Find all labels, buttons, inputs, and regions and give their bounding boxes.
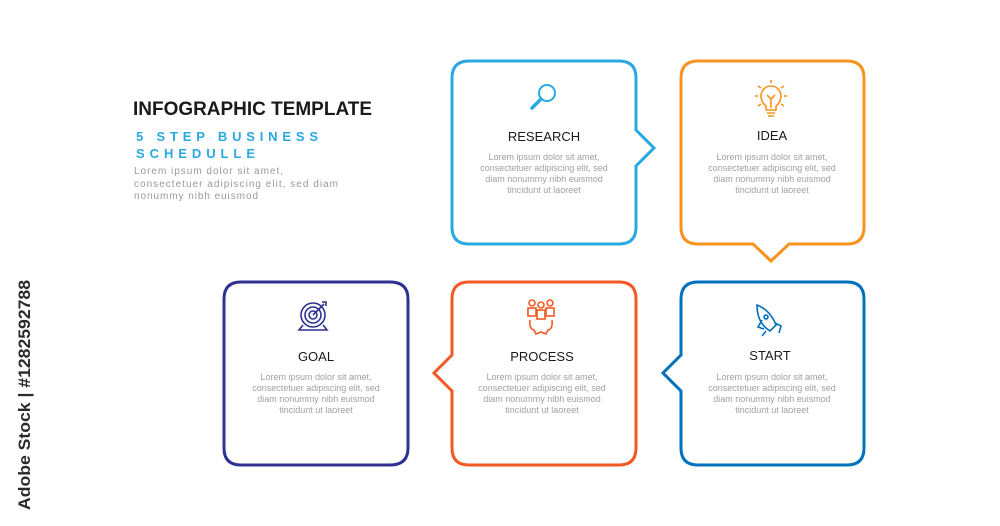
panel: start: diam nonummy nibh euismod xyxy=(713,394,831,404)
intro text: nonummy nibh euismod xyxy=(134,191,258,202)
panel: idea: IDEA xyxy=(757,128,787,143)
panel: goal: Lorem ipsum dolor sit amet, xyxy=(260,372,372,382)
subtitle: SCHEDULLE xyxy=(136,146,255,161)
icon: light bulb xyxy=(755,80,787,116)
intro text xyxy=(134,166,338,202)
icon: rocket xyxy=(757,305,781,336)
panel: process: diam nonummy nibh euismod xyxy=(483,394,601,404)
panel: process: consectetuer adipiscing elit, sed xyxy=(478,383,606,393)
panel: goal: consectetuer adipiscing elit, sed xyxy=(252,383,380,393)
panel: research: RESEARCH xyxy=(508,129,580,144)
title block xyxy=(133,99,372,202)
panel: process xyxy=(434,282,636,465)
panel: goal: GOAL xyxy=(298,349,334,364)
panel: idea: diam nonummy nibh euismod xyxy=(713,174,831,184)
panel: process: tincidunt ut laoreet xyxy=(505,405,579,415)
panel: start: Lorem ipsum dolor sit amet, xyxy=(716,372,828,382)
panel: research: tincidunt ut laoreet xyxy=(507,185,581,195)
panel: idea: Lorem ipsum dolor sit amet, xyxy=(716,152,828,162)
subtitle: 5 STEP BUSINESS xyxy=(136,129,318,144)
panel: research: consectetuer adipiscing elit, sed xyxy=(480,163,608,173)
subtitle xyxy=(136,129,318,161)
panel: start xyxy=(663,282,864,465)
panel: idea xyxy=(681,61,864,261)
panel: research xyxy=(452,61,654,244)
intro text: Lorem ipsum dolor sit amet, xyxy=(134,166,283,177)
panel: start: tincidunt ut laoreet xyxy=(735,405,809,415)
icon: team gear xyxy=(528,300,554,334)
panel: research: Lorem ipsum dolor sit amet, xyxy=(488,152,600,162)
panel: goal: tincidunt ut laoreet xyxy=(279,405,353,415)
panel: goal: diam nonummy nibh euismod xyxy=(257,394,375,404)
panel: start: START xyxy=(749,348,791,363)
panel: process: Lorem ipsum dolor sit amet, xyxy=(486,372,598,382)
title: INFOGRAPHIC TEMPLATE xyxy=(133,99,372,120)
panel: process: PROCESS xyxy=(510,349,574,364)
icon: target xyxy=(299,302,327,330)
watermark id: Adobe Stock | #1282592788 xyxy=(15,280,34,510)
panel: goal xyxy=(224,282,408,465)
panel: idea: consectetuer adipiscing elit, sed xyxy=(708,163,836,173)
icon: magnifier xyxy=(532,85,555,108)
panel: idea: tincidunt ut laoreet xyxy=(735,185,809,195)
intro text: consectetuer adipiscing elit, sed diam xyxy=(134,179,338,190)
panel: research: diam nonummy nibh euismod xyxy=(485,174,603,184)
panel: start: consectetuer adipiscing elit, sed xyxy=(708,383,836,393)
